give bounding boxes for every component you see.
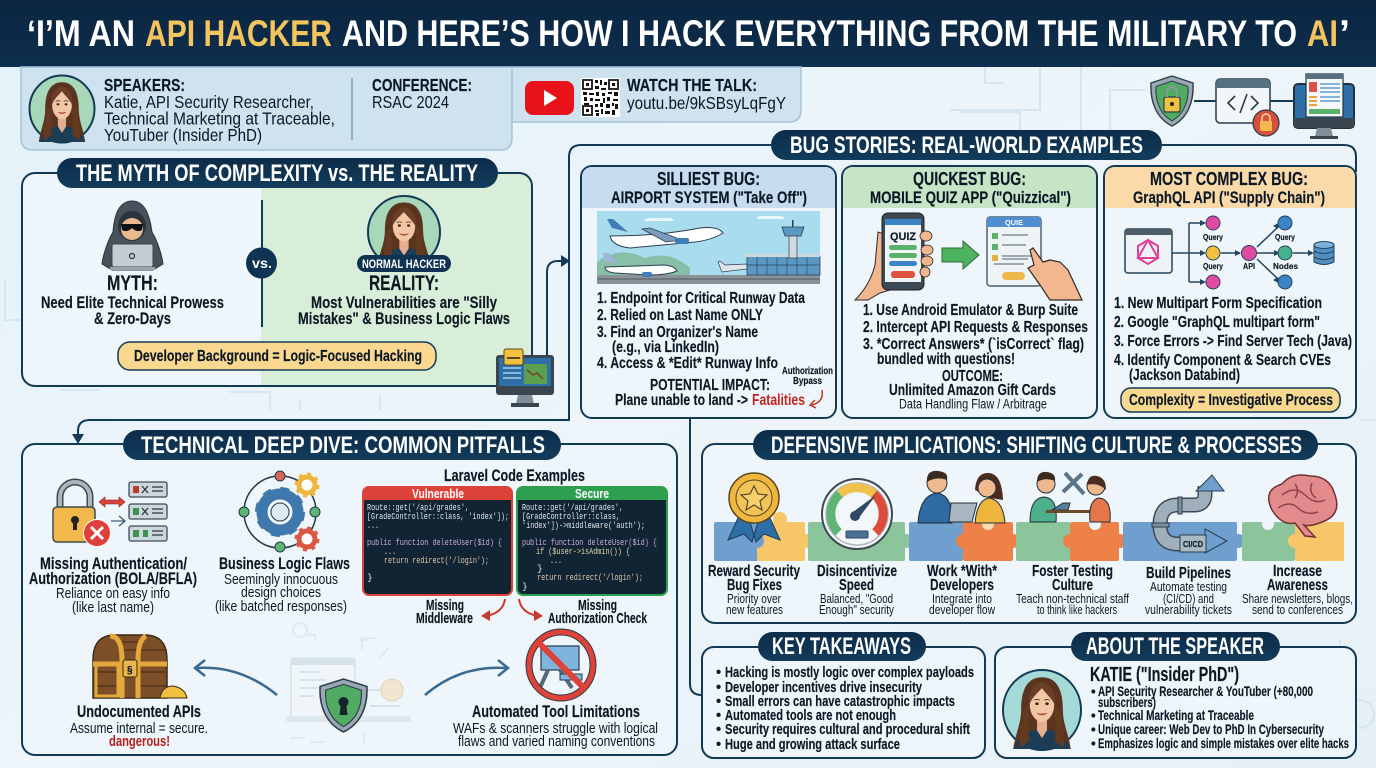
text: reward security bug fixes: Priority over xyxy=(727,591,782,606)
icon: mini monitor xyxy=(496,349,554,407)
text: increase awareness: Increase xyxy=(1273,563,1322,580)
diagram: graphql flow: API xyxy=(1243,261,1255,271)
diagram: graphql flow: Query xyxy=(1203,232,1223,242)
watch text: WATCH THE TALK: xyxy=(627,75,757,95)
heading: bug stories: BUG STORIES: REAL-WORLD EXAMPLES xyxy=(790,132,1143,159)
text: work with developers: developer flow xyxy=(929,602,995,617)
icon: central shield on faded window xyxy=(286,623,411,745)
panel: watch the talk xyxy=(512,67,801,122)
outcome text: OUTCOME: xyxy=(942,368,1003,385)
heading: bug stories xyxy=(771,130,1162,160)
text: build pipelines xyxy=(1145,565,1232,617)
code block: vulnerable xyxy=(363,487,512,595)
list: silliest bug steps: (e.g., via LinkedIn) xyxy=(612,339,719,356)
list: takeaways: Developer incentives drive insecurity xyxy=(725,680,922,696)
code block: vulnerable: Vulnerable xyxy=(412,487,464,501)
list: takeaways: • xyxy=(716,680,721,696)
text: work with developers xyxy=(927,563,998,617)
impact text: POTENTIAL IMPACT: xyxy=(650,377,770,394)
arrow: myth to bug stories xyxy=(547,255,570,356)
text: missing authentication xyxy=(29,555,197,616)
code block: vulnerable: ... xyxy=(367,520,379,531)
text: foster testing culture: to think like hackers xyxy=(1037,602,1117,617)
icon: security shield, code window, monitor xyxy=(1151,74,1354,139)
icon: youtube xyxy=(525,81,574,115)
heading: most complex bug xyxy=(1133,168,1325,207)
arrow: to undocumented apis xyxy=(195,660,277,695)
code block: vulnerable: return redirect('/login'); xyxy=(384,555,489,566)
diagram: graphql flow: Query xyxy=(1275,232,1295,242)
list: silliest bug steps: 3. Find an Organizer's Name xyxy=(597,324,758,341)
text: speaker bio: • xyxy=(1091,722,1096,737)
myth text xyxy=(41,272,224,328)
icon: phone in hand: QUIZ xyxy=(890,231,916,243)
text: automated tool limitations xyxy=(453,703,658,750)
heading: laravel code examples: Laravel Code Examples xyxy=(444,467,585,485)
text: disincentivize speed xyxy=(817,563,897,617)
text: disincentivize speed: Speed xyxy=(839,577,874,594)
list: takeaways: Huge and growing attack surface xyxy=(725,737,900,753)
text: foster testing culture: Teach non-technical staff xyxy=(1016,591,1129,606)
text: disincentivize speed: Disincentivize xyxy=(817,563,897,580)
impact text: Plane unable to land -> xyxy=(615,392,748,409)
icon: speed gauge xyxy=(822,479,892,549)
icon: hooded hacker xyxy=(102,201,163,270)
puzzle strip xyxy=(714,512,1344,561)
panel: myth vs reality xyxy=(22,158,532,386)
code block: secure: [GradeController::class, xyxy=(522,511,620,522)
diagram: graphql flow xyxy=(1125,216,1334,289)
text: automated tool limitations: flaws and varied naming conventions xyxy=(458,733,655,750)
myth text: MYTH: xyxy=(107,272,158,295)
connector: bug stories outline to technical deep dive xyxy=(72,145,1356,444)
text: increase awareness: Awareness xyxy=(1267,577,1328,594)
list: quickest bug steps xyxy=(863,302,1088,368)
list: takeaways: Security requires cultural and procedural shift xyxy=(725,722,970,738)
icon: brain xyxy=(1269,475,1337,537)
code block: secure: 'index'])->middleware('auth'); xyxy=(522,520,645,531)
list: takeaways: • xyxy=(716,708,721,724)
diagram: graphql flow: Query xyxy=(1203,261,1223,271)
panel: speakers and conference xyxy=(21,67,512,150)
text: speaker bio: • xyxy=(1091,684,1096,699)
list: takeaways: Automated tools are not enough xyxy=(725,708,896,724)
text: increase awareness xyxy=(1242,563,1353,617)
icon: phone in hand xyxy=(855,213,933,300)
code block: secure: Route::get('/api/grades', xyxy=(522,502,623,513)
heading: key takeaways xyxy=(758,632,926,661)
outcome text xyxy=(889,368,1056,412)
list: silliest bug steps xyxy=(597,290,805,372)
code block: vulnerable: ... xyxy=(384,546,396,557)
text: missing authentication: Missing Authentication/ xyxy=(40,555,187,573)
speakers text: SPEAKERS: xyxy=(104,75,185,95)
code block: vulnerable: Route::get('/api/grades', xyxy=(367,502,469,513)
code block: secure: } xyxy=(522,581,528,592)
list: takeaways: • xyxy=(716,694,721,710)
impact text xyxy=(615,377,805,409)
code block: vulnerable: [GradeController::class, 'index']); xyxy=(367,511,509,522)
text: speaker bio: Technical Marketing at Traceable xyxy=(1098,708,1254,723)
callout: missing authorization check xyxy=(519,597,647,627)
code block: secure: return redirect('/login'); xyxy=(537,572,643,583)
connector: to key takeaways xyxy=(690,418,702,695)
text: business logic flaws: Business Logic Flaws xyxy=(219,555,350,573)
title banner: AI xyxy=(1307,13,1338,54)
list: takeaways: Small errors can have catastrophic impacts xyxy=(725,694,955,710)
panel: defensive implications xyxy=(702,430,1356,623)
icon: qr code xyxy=(581,78,620,117)
icon: business logic gears xyxy=(239,471,320,552)
callout: missing middleware: Middleware xyxy=(416,610,473,627)
heading: quickest bug: MOBILE QUIZ APP ("Quizzical") xyxy=(870,189,1071,207)
text: undocumented apis xyxy=(70,703,208,750)
reality text: REALITY: xyxy=(369,272,439,295)
callout: missing authorization check: Missing xyxy=(578,597,617,614)
list: takeaways: • xyxy=(716,722,721,738)
panel: quickest bug xyxy=(842,166,1097,418)
code block: secure xyxy=(517,487,667,595)
reality text xyxy=(298,272,510,328)
conference text: CONFERENCE: xyxy=(372,75,472,95)
speakers text: Katie, API Security Researcher, xyxy=(104,92,314,112)
heading: technical deep dive: TECHNICAL DEEP DIVE: COMMON PITFALLS xyxy=(141,432,545,459)
text: foster testing culture xyxy=(1016,563,1129,617)
icon: two developers xyxy=(918,471,1005,523)
text: work with developers: Developers xyxy=(930,577,994,594)
list: complex bug steps xyxy=(1114,295,1352,384)
title banner: ‘I’M AN xyxy=(27,13,135,54)
conference text xyxy=(372,75,472,112)
text: reward security bug fixes: new features xyxy=(726,602,783,617)
watch text xyxy=(627,75,786,113)
heading: most complex bug: GraphQL API ("Supply Chain") xyxy=(1133,189,1325,207)
diagram: graphql flow: Nodes xyxy=(1273,261,1298,271)
list: quickest bug steps: 3. *Correct Answers* (`isCorrect` flag) xyxy=(863,336,1084,353)
code block: secure: ... xyxy=(550,555,562,566)
code block: vulnerable: } xyxy=(367,572,373,583)
text: build pipelines: (CI/CD) and xyxy=(1163,591,1214,606)
reality text: Most Vulnerabilities are "Silly xyxy=(311,293,497,312)
text: reward security bug fixes: Reward Security xyxy=(708,563,800,580)
text: automated tool limitations: Automated Tool Limitations xyxy=(472,703,640,721)
text: undocumented apis: Assume internal = secure. xyxy=(70,720,208,737)
panel: technical deep dive xyxy=(22,430,677,755)
list: silliest bug steps: 2. Relied on Last Name ONLY xyxy=(597,307,764,324)
text: build pipelines: Automate testing xyxy=(1150,579,1227,594)
icon: pipeline: CI/CD xyxy=(1183,540,1203,549)
panel: most complex bug xyxy=(1104,166,1356,418)
code block: secure: if ($user->isAdmin()) { xyxy=(536,546,630,557)
text: build pipelines: Build Pipelines xyxy=(1146,565,1231,582)
text: disincentivize speed: Balanced, "Good xyxy=(820,591,893,606)
icon: treasure chest: § xyxy=(127,665,133,676)
text: reward security bug fixes: Bug Fixes xyxy=(727,577,782,594)
text: business logic flaws xyxy=(215,555,350,615)
text: foster testing culture: Culture xyxy=(1052,577,1093,594)
list: silliest bug steps: 1. Endpoint for Critical Runway Data xyxy=(597,290,805,307)
list: silliest bug steps: 4. Access & *Edit* Runway Info xyxy=(597,355,778,372)
image: airport scene xyxy=(597,211,820,284)
callout: complexity xyxy=(1121,388,1340,412)
heading: silliest bug xyxy=(611,168,807,207)
callout: missing middleware: Missing xyxy=(426,597,464,614)
code block: vulnerable: public function deleteUser($id) { xyxy=(367,537,502,548)
text: foster testing culture: Foster Testing xyxy=(1032,563,1113,580)
note: authorization bypass xyxy=(782,366,833,408)
text: undocumented apis: Undocumented APIs xyxy=(77,703,201,721)
code block: secure: } xyxy=(537,563,543,574)
text: speaker bio: subscribers) xyxy=(1098,695,1156,710)
speakers text xyxy=(104,75,335,145)
myth text: Need Elite Technical Prowess xyxy=(41,293,224,312)
text: work with developers: Work *With* xyxy=(927,563,998,580)
icon: normal hacker xyxy=(357,196,451,272)
icon: treasure chest xyxy=(93,635,187,698)
list: takeaways: • xyxy=(716,665,721,681)
speakers text: Technical Marketing at Traceable, xyxy=(104,108,335,128)
text: business logic flaws: design choices xyxy=(241,584,321,601)
list: quickest bug steps: 1. Use Android Emulator & Burp Suite xyxy=(863,302,1078,319)
reality text: Mistakes" & Business Logic Flaws xyxy=(298,309,510,328)
conference text: RSAC 2024 xyxy=(372,92,449,112)
arrow: to automated tool limitations xyxy=(425,660,508,695)
icon: katie portrait xyxy=(1003,670,1081,750)
list: complex bug steps: (Jackson Databind) xyxy=(1129,367,1240,384)
text: missing authentication: Authorization (BOLA/BFLA) xyxy=(29,570,197,588)
callout: developer background: Developer Background = Logic-Focused Hacking xyxy=(134,348,422,365)
text: work with developers: Integrate into xyxy=(932,591,992,606)
icon: pipeline xyxy=(1152,475,1227,553)
text: missing authentication: (like last name) xyxy=(72,599,154,616)
watch text: youtu.be/9kSBsyLqFgY xyxy=(627,93,786,113)
vs badge xyxy=(246,248,277,278)
myth text: & Zero-Days xyxy=(94,309,171,328)
icon: testers with tools xyxy=(1030,472,1110,522)
text: automated tool limitations: WAFs & scanners struggle with logical xyxy=(453,720,658,737)
heading: about the speaker xyxy=(1071,632,1280,661)
title banner: ’ xyxy=(1339,13,1350,54)
text: speaker bio: KATIE ("Insider PhD") xyxy=(1090,664,1239,686)
heading: quickest bug: QUICKEST BUG: xyxy=(913,168,1026,189)
list: quickest bug steps: 2. Intercept API Requests & Responses xyxy=(863,319,1088,336)
vs badge: vs. xyxy=(252,255,272,271)
icon: normal hacker: NORMAL HACKER xyxy=(362,259,447,271)
heading: quickest bug xyxy=(870,168,1071,207)
list: takeaways: • xyxy=(716,737,721,753)
panel: silliest bug xyxy=(581,166,836,418)
callout: missing authorization check: Authorization Check xyxy=(548,610,647,627)
speakers text: YouTuber (Insider PhD) xyxy=(104,125,262,145)
panel: key takeaways xyxy=(702,632,985,758)
list: quickest bug steps: bundled with questions! xyxy=(877,351,1015,368)
heading: silliest bug: SILLIEST BUG: xyxy=(657,168,760,189)
panel: about the speaker xyxy=(995,632,1356,758)
note: authorization bypass: Bypass xyxy=(793,376,822,387)
note: authorization bypass: Authorization xyxy=(782,366,833,377)
text: business logic flaws: (like batched responses) xyxy=(215,598,347,615)
title banner xyxy=(0,0,1376,67)
heading: most complex bug: MOST COMPLEX BUG: xyxy=(1150,168,1308,189)
icon: quiz document with pointing hand: QUIE xyxy=(1005,220,1023,227)
callout: developer background xyxy=(118,342,436,370)
text: undocumented apis: dangerous! xyxy=(109,733,170,750)
outcome text: Unlimited Amazon Gift Cards xyxy=(889,382,1056,399)
heading: myth of complexity: THE MYTH OF COMPLEXITY vs. THE REALITY xyxy=(76,160,478,187)
icon: quiz document with pointing hand xyxy=(987,217,1082,300)
text: business logic flaws: Seemingly innocuous xyxy=(224,571,338,588)
code block: secure: Secure xyxy=(575,487,609,501)
heading: key takeaways: KEY TAKEAWAYS xyxy=(772,633,911,660)
text: increase awareness: send to conferences xyxy=(1252,602,1343,617)
list: takeaways xyxy=(716,665,974,753)
code block: secure: public function deleteUser($id) { xyxy=(522,537,657,548)
icon: speaker avatar xyxy=(30,76,94,142)
impact text: Fatalities xyxy=(752,392,805,409)
list: takeaways: Hacking is mostly logic over complex payloads xyxy=(725,665,974,681)
text: speaker bio: • xyxy=(1091,708,1096,723)
text: reward security bug fixes xyxy=(708,563,800,617)
heading: about the speaker: ABOUT THE SPEAKER xyxy=(1086,633,1264,660)
text: disincentivize speed: Enough" security xyxy=(819,602,894,617)
list: complex bug steps: 2. Google "GraphQL multipart form" xyxy=(1114,314,1320,331)
icon: no tools sign xyxy=(529,632,593,698)
title banner: API HACKER xyxy=(145,13,332,54)
outcome text: Data Handling Flaw / Arbitrage xyxy=(899,396,1047,412)
text: speaker bio: • xyxy=(1091,736,1096,751)
icon: medal xyxy=(728,473,780,542)
text: build pipelines: vulnerability tickets xyxy=(1145,602,1232,617)
icon: broken lock with servers xyxy=(53,482,167,546)
text: missing authentication: Reliance on easy info xyxy=(56,585,170,602)
heading: silliest bug: AIRPORT SYSTEM ("Take Off") xyxy=(611,189,807,207)
callout: missing middleware xyxy=(416,597,505,627)
list: complex bug steps: 1. New Multipart Form Specification xyxy=(1114,295,1322,312)
text: speaker bio xyxy=(1090,664,1349,751)
arrow: green xyxy=(942,241,979,269)
